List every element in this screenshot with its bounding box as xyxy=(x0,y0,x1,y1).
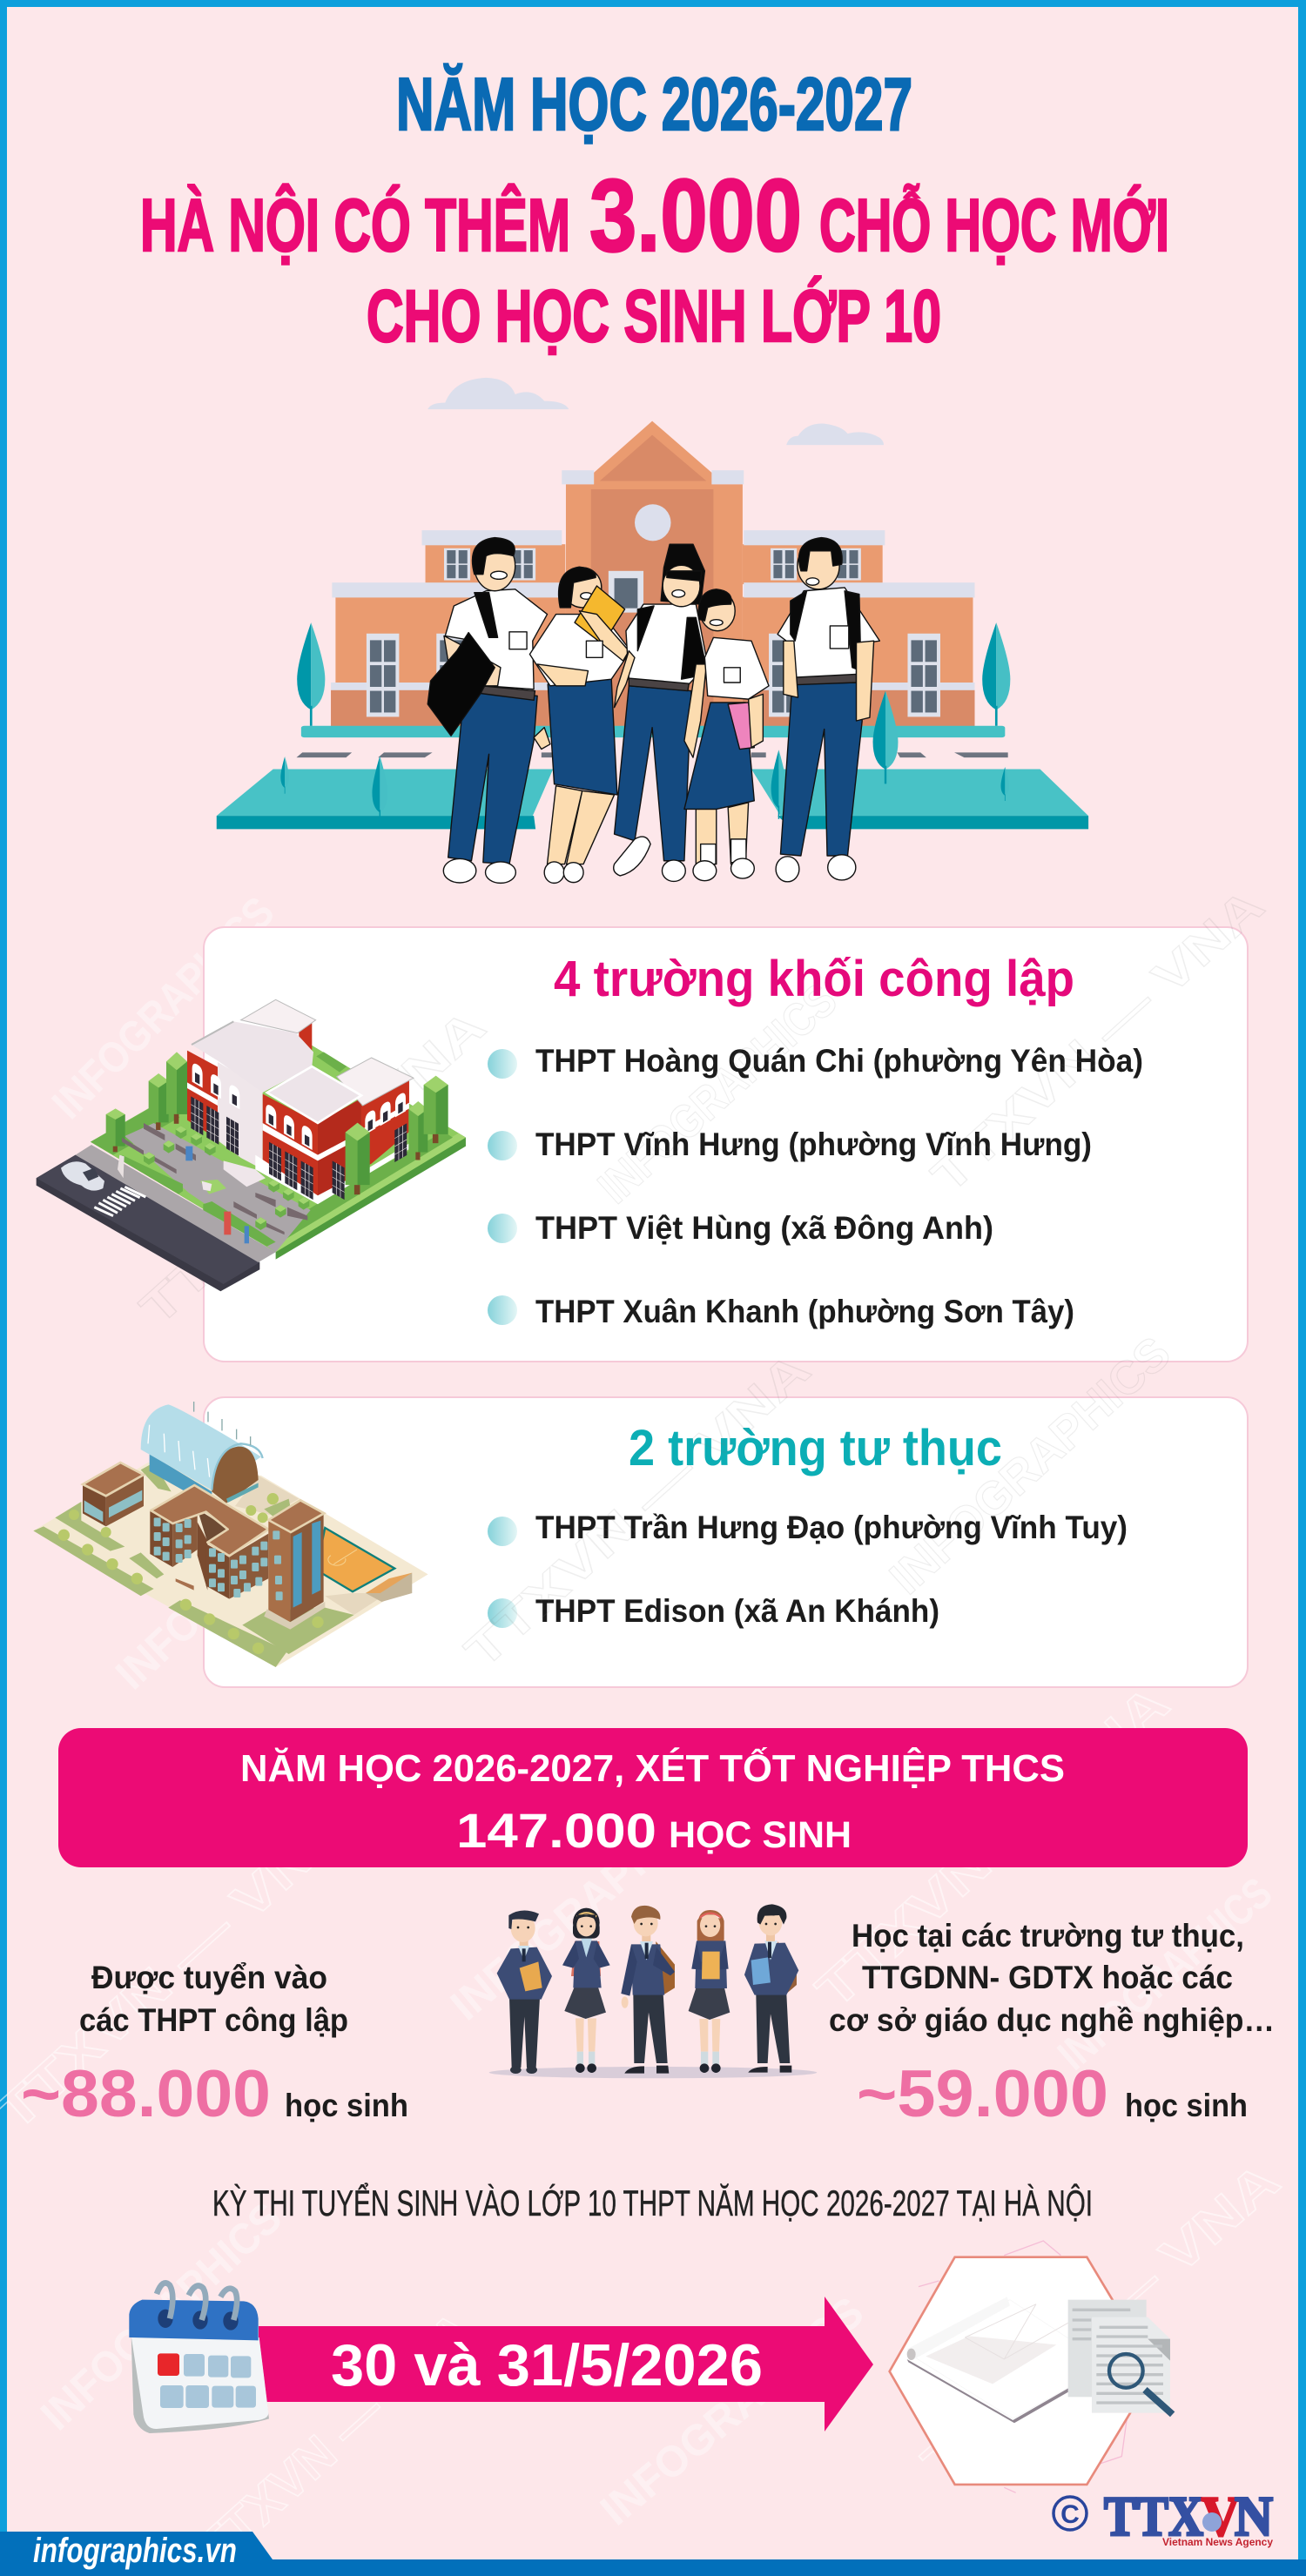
title number: 3.000 xyxy=(589,158,802,273)
watermarks on background: INFOGRAPHICS xyxy=(43,887,284,1128)
campus ground xyxy=(33,1463,428,1667)
icon: clouds xyxy=(427,378,884,445)
stat: other education paths xyxy=(829,1918,1275,2131)
watermarks on cards: TTXVN — VNA xyxy=(131,999,495,1335)
copyright mark: C xyxy=(1060,2500,1080,2529)
school name 1: THPT Hoàng Quán Chi (phường Yên Hòa) xyxy=(535,1043,1143,1079)
uniform boy 3 xyxy=(621,1906,675,2074)
agency tagline: Vietnam News Agency xyxy=(1162,2536,1273,2548)
basketball court xyxy=(316,1528,412,1602)
road xyxy=(37,1123,311,1291)
illustration: school and students xyxy=(217,378,1088,883)
other paths label 3: cơ sở giáo dục nghề nghiệp… xyxy=(829,2002,1275,2038)
student 3 xyxy=(614,544,708,881)
school building xyxy=(331,421,974,728)
title line 3: CHO HỌC SINH LỚP 10 xyxy=(367,275,941,357)
watermarks on cards: INFOGRAPHICS xyxy=(880,1327,1181,1604)
watermarks on background: INFOGRAPHICS xyxy=(441,1782,723,2029)
watermarks on background: TTXVN — VNA xyxy=(912,2152,1290,2492)
trees xyxy=(280,622,1010,823)
school name 4: THPT Xuân Khanh (phường Sơn Tây) xyxy=(535,1294,1074,1329)
bullet 1 xyxy=(488,1049,517,1079)
other paths label 2: TTGDNN- GDTX hoặc các xyxy=(862,1960,1233,1995)
panel: private schools xyxy=(204,1397,1248,1687)
exam date: 30 và 31/5/2026 xyxy=(331,2332,763,2398)
other paths unit: học sinh xyxy=(1125,2088,1248,2123)
watermarks on cards: TTXVN — VNA xyxy=(455,1342,820,1678)
walls xyxy=(187,1021,409,1204)
banner: total students xyxy=(58,1728,1248,1867)
illustration: exam documents xyxy=(890,2241,1173,2492)
bullet 6 xyxy=(488,1598,517,1628)
icon: magnifying glass xyxy=(1109,2354,1173,2414)
footer site name: infographics.vn xyxy=(33,2532,237,2570)
title line 2 left: HÀ NỘI CÓ THÊM xyxy=(140,184,570,267)
main building xyxy=(150,1485,268,1599)
heading: private schools: 2 trường tư thục xyxy=(629,1420,1002,1476)
stat label: Được tuyển vào xyxy=(91,1960,327,1995)
bullet 4 xyxy=(488,1295,517,1325)
other paths label 1: Học tại các trường tư thục, xyxy=(852,1918,1244,1954)
school name 2: THPT Vĩnh Hưng (phường Vĩnh Hưng) xyxy=(535,1127,1092,1162)
arena dome xyxy=(141,1402,263,1503)
agency name xyxy=(1104,2485,1273,2548)
ground shadow xyxy=(489,2067,817,2078)
heading: public schools: 4 trường khối công lập xyxy=(554,951,1074,1007)
bullet 3 xyxy=(488,1214,517,1243)
agency name: TTX xyxy=(1104,2485,1203,2548)
school name 6: THPT Edison (xã An Khánh) xyxy=(535,1593,939,1629)
illustration: five students in uniform xyxy=(489,1904,817,2078)
uniform boy 1 xyxy=(497,1911,552,2074)
watermarks on cards xyxy=(131,878,1274,1678)
watermarks on background xyxy=(0,887,1290,2576)
illustration: red school building xyxy=(37,999,466,1291)
bullet 5 xyxy=(488,1517,517,1546)
banner number: 147.000 xyxy=(456,1803,656,1858)
stat: public admissions xyxy=(21,1960,408,2131)
agency name: N xyxy=(1235,2485,1273,2548)
tower xyxy=(264,1500,325,1630)
other paths number: ~59.000 xyxy=(857,2057,1108,2131)
school name 5: THPT Trần Hưng Đạo (phường Vĩnh Tuy) xyxy=(535,1510,1128,1545)
watermarks on background: TTXVN — VNA xyxy=(187,2302,484,2576)
small left building xyxy=(83,1463,144,1526)
uniform boy 5 xyxy=(744,1904,798,2073)
watermarks on cards: INFOGRAPHICS xyxy=(589,973,846,1214)
bullet 2 xyxy=(488,1131,517,1160)
title line 1: NĂM HỌC 2026-2027 xyxy=(396,64,912,146)
copyright mark xyxy=(1054,2497,1087,2530)
document pages xyxy=(1068,2300,1170,2413)
agency name: V xyxy=(1202,2485,1240,2548)
uniform girl 2 xyxy=(562,1908,610,2073)
banner unit: HỌC SINH xyxy=(669,1814,852,1856)
arrow with exam date xyxy=(259,2297,873,2431)
title xyxy=(140,64,1169,357)
watermarks on cards: TTXVN — VNA xyxy=(922,878,1274,1203)
watermarks on background: INFOGRAPHICS xyxy=(106,1452,366,1698)
stat unit: học sinh xyxy=(285,2088,408,2123)
roofs xyxy=(192,999,414,1123)
campus trees xyxy=(58,1493,324,1654)
back hexagon outline xyxy=(919,2241,1128,2492)
garden details xyxy=(106,1052,448,1247)
uniform girl 4 xyxy=(689,1910,730,2073)
school grounds xyxy=(217,726,1088,829)
student 4 xyxy=(684,589,769,881)
watermarks on background: INFOGRAPHICS xyxy=(591,2287,872,2534)
panel: public schools xyxy=(204,927,1248,1362)
student 5 xyxy=(776,538,879,882)
logo: TTXVN xyxy=(1054,2485,1273,2548)
illustration: private school campus xyxy=(33,1402,428,1667)
student 2 xyxy=(529,567,630,883)
open document xyxy=(907,2297,1110,2423)
banner line 1: NĂM HỌC 2026-2027, XÉT TỐT NGHIỆP THCS xyxy=(240,1745,1065,1790)
stat number: ~88.000 xyxy=(21,2057,271,2131)
windows xyxy=(191,1061,407,1200)
watermarks on background: TTXVN — VNA xyxy=(805,1674,1180,2020)
hexagon xyxy=(890,2257,1155,2485)
student 1 xyxy=(427,538,548,883)
icon: calendar xyxy=(129,2283,269,2433)
watermarks on background: INFOGRAPHICS xyxy=(31,2193,291,2439)
footer tab xyxy=(0,2532,1306,2576)
plot xyxy=(91,1045,466,1260)
students group xyxy=(427,538,879,883)
school name 3: THPT Việt Hùng (xã Đông Anh) xyxy=(535,1210,993,1246)
stat label line 2: các THPT công lập xyxy=(79,2002,348,2038)
